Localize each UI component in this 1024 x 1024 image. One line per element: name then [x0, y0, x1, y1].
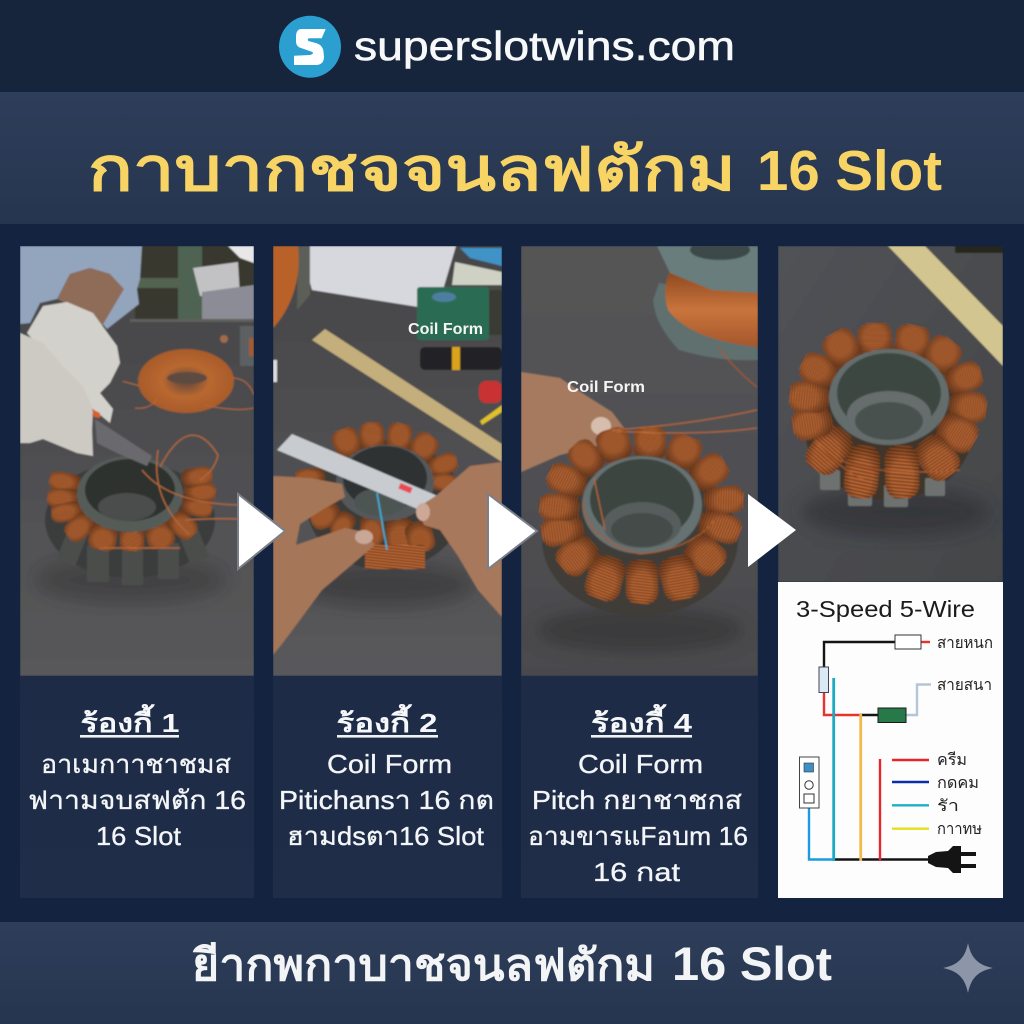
photo label: Coil Form	[408, 321, 483, 338]
footer text: ยีากพกาบาชจนลฟตักม	[192, 941, 655, 990]
icon: sparkle	[943, 943, 993, 993]
wires	[809, 642, 932, 861]
step text: ฟาามจบสฟตัก 16	[28, 785, 246, 815]
wire labels: สายหนก	[937, 635, 993, 652]
caption panel: step 2	[273, 676, 502, 898]
panel: step 3	[521, 240, 758, 898]
step text: อามขารแFอบm 16	[528, 821, 748, 851]
step text: อาเมกาาชาชมส	[41, 749, 231, 779]
step text	[279, 749, 494, 851]
caption panel: step 1	[20, 676, 254, 898]
legend: กดคม	[937, 775, 979, 792]
title band	[0, 92, 1024, 224]
arrow: step 3 to 4	[748, 494, 796, 567]
step text: Coil Form	[327, 749, 452, 779]
title: กาบากชจจนลฟตักม	[88, 136, 736, 203]
photo: cutting stator with pliers	[20, 246, 254, 676]
step text: 16 กat	[593, 857, 681, 887]
photo label: Coil Form	[567, 379, 645, 396]
step text: ฮามdsตา16 Slot	[287, 821, 485, 851]
step heading: ร้องกี้ 1	[80, 703, 180, 738]
legend: กาาทษ	[937, 821, 982, 838]
photo: finished stator	[778, 246, 1003, 582]
title	[88, 136, 942, 203]
stator coils	[538, 425, 745, 604]
wire labels	[937, 635, 993, 694]
step text: 16 Slot	[96, 821, 182, 851]
step heading: ร้องกี้ 4	[591, 703, 693, 738]
switch	[800, 757, 819, 808]
stator coils	[47, 465, 216, 552]
photo: measuring with ruler	[273, 246, 502, 676]
step heading: ร้องกี้ 2	[336, 703, 438, 738]
title: 16 Slot	[757, 139, 942, 203]
stator coils	[294, 421, 460, 555]
footer text	[192, 937, 832, 990]
wiring diagram	[778, 582, 1003, 898]
legend: ครีม	[937, 751, 967, 769]
step text: Pitch กยาชาชกส	[532, 785, 742, 815]
header bar	[0, 0, 1024, 90]
arrow: step 2 to 3	[488, 494, 537, 569]
icon: power plug	[928, 846, 976, 873]
photo: winding with spool of copper wire	[521, 240, 758, 676]
step text: Coil Form	[578, 749, 703, 779]
legend	[892, 751, 982, 838]
footer band	[0, 922, 1024, 1024]
site name: superslotwins.com	[354, 23, 735, 69]
legend: รัา	[937, 798, 959, 815]
stator coils	[789, 321, 987, 500]
wire labels: สายสนา	[937, 677, 992, 694]
capacitor and connector boxes	[819, 635, 921, 722]
footer text: 16 Slot	[672, 937, 832, 990]
step text: Pitichansา 16 กต	[279, 785, 494, 815]
arrow: step 1 to 2	[238, 494, 285, 569]
panel: step 1	[20, 246, 254, 898]
diagram title: 3-Speed 5-Wire	[796, 596, 975, 622]
step text	[28, 749, 246, 851]
panel: step 4	[778, 246, 1003, 898]
logo icon	[279, 16, 341, 78]
panel: step 2	[273, 246, 502, 898]
caption panel: step 3	[521, 676, 758, 898]
step text	[528, 749, 748, 887]
